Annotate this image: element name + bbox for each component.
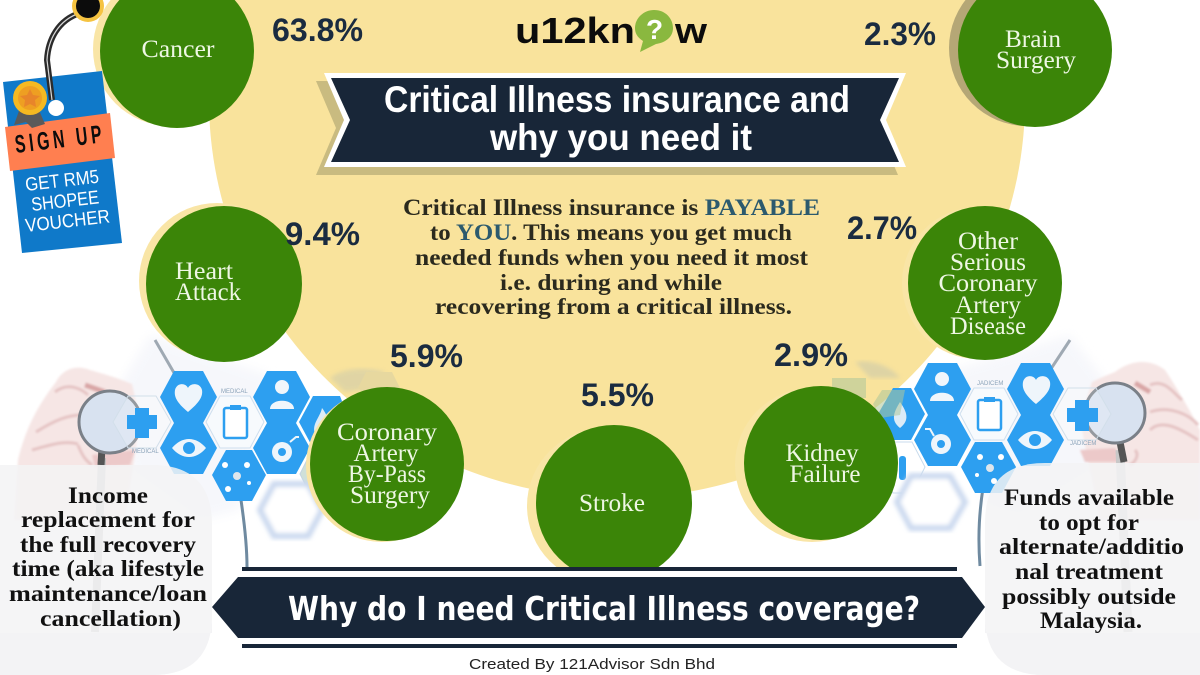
hex: clipboard: MEDICAL <box>221 389 248 395</box>
circle: Coronary Artery By-Pass Surgery: Coronary <box>337 419 438 446</box>
hand <box>14 368 140 520</box>
hex: blurred empty <box>897 476 965 528</box>
tag text: voucher: VOUCHER <box>24 206 111 237</box>
circle: Stroke: Stroke <box>579 490 645 517</box>
bottom banner <box>212 567 985 648</box>
circle: Other Serious Coronary Artery Disease: Coronary <box>938 270 1038 297</box>
panel: funds available <box>985 463 1200 675</box>
hex: clipboard: JADICEM <box>977 381 1003 387</box>
hex: clipboard <box>960 381 1018 440</box>
panel: funds available: possibly outside <box>1002 584 1176 610</box>
circle: Coronary Artery By-Pass Surgery: Surgery <box>350 482 431 509</box>
hex: person <box>914 363 971 415</box>
circle: Other Serious Coronary Artery Disease: Other <box>958 228 1019 255</box>
body text: to YOU. This means you get much <box>430 220 792 246</box>
tag text: sign up: SIGN UP <box>13 121 103 159</box>
body text: recovering from a critical illness. <box>435 294 792 320</box>
panel: income replacement: Income <box>68 483 148 509</box>
body text: i.e. during and while <box>500 270 722 296</box>
panel: income replacement <box>0 465 212 675</box>
hex: heart <box>160 371 217 423</box>
body text: Critical Illness insurance is PAYABLE <box>403 195 820 221</box>
hex: molecule <box>212 450 266 501</box>
panel: income replacement: the full recovery <box>20 532 196 558</box>
body text <box>403 195 820 320</box>
tag text: voucher: GET RM5 <box>24 167 100 196</box>
circle: Kidney Failure <box>735 386 898 542</box>
percent: 2.7%: 2.7% <box>847 210 917 246</box>
hex: clipboard <box>206 389 264 448</box>
percent: 5.9%: 5.9% <box>390 338 463 374</box>
hex: pale teal <box>300 448 350 500</box>
percent: 63.8%: 63.8% <box>272 12 363 48</box>
circle: Stroke <box>527 425 692 584</box>
hex: molecule <box>961 442 1016 493</box>
hex: cross <box>1053 388 1111 447</box>
faint hex over yellow <box>832 361 905 418</box>
lens <box>79 391 141 453</box>
circle: Other Serious Coronary Artery Disease: Disease <box>950 313 1026 340</box>
percent: 5.5%: 5.5% <box>581 377 654 413</box>
hand <box>1080 362 1200 520</box>
panel: funds available: nal treatment <box>1015 559 1163 585</box>
circle: Other Serious Coronary Artery Disease: Artery <box>955 292 1022 319</box>
circle: Brain Surgery: Surgery <box>996 47 1077 74</box>
panel: income replacement: maintenance/loan <box>9 581 207 607</box>
panel: funds available: Malaysia. <box>1040 608 1142 634</box>
panel: income replacement: cancellation) <box>40 606 181 632</box>
tag text: voucher: SHOPEE <box>30 187 100 216</box>
hex: flame <box>299 396 350 448</box>
panel: funds available: Funds available <box>1004 485 1174 511</box>
percent: 2.9%: 2.9% <box>774 337 848 373</box>
faint hex over yellow <box>330 369 400 395</box>
logo: u12know <box>515 10 708 52</box>
hex: cross <box>113 396 171 455</box>
percent: 2.3%: 2.3% <box>864 16 936 52</box>
hex: eye <box>1007 415 1064 466</box>
tag band <box>5 113 115 171</box>
body text: needed funds when you need it most <box>415 245 808 271</box>
hex: test tube <box>880 442 925 493</box>
circle: Coronary Artery By-Pass Surgery: By-Pass <box>348 461 426 488</box>
signup tag <box>3 0 122 253</box>
hex: wheelchair <box>253 423 310 474</box>
panel: income replacement: time (aka lifestyle <box>12 556 204 582</box>
hex: person <box>253 371 310 423</box>
circle: Kidney Failure: Kidney <box>786 440 859 467</box>
circle: Heart Attack: Heart <box>175 258 233 285</box>
circle: Heart Attack: Attack <box>175 279 241 306</box>
hex: eye <box>160 423 217 474</box>
logo: u12know: ? <box>646 14 663 45</box>
circle: Other Serious Coronary Artery Disease <box>902 206 1062 360</box>
peg <box>72 0 104 22</box>
hex: droplets <box>878 388 925 440</box>
hex: cross: JADICEM <box>1070 441 1096 447</box>
logo: u12know: w <box>674 10 708 51</box>
tag text: voucher <box>24 167 111 237</box>
panel: income replacement: replacement for <box>21 507 195 533</box>
yellow circle background <box>209 0 1025 498</box>
panel: funds available: alternate/additio <box>999 534 1184 560</box>
title text <box>384 79 850 158</box>
logo: u12know: u12kn <box>515 10 635 51</box>
circle: Cancer <box>93 0 254 128</box>
panel: funds available: to opt for <box>1039 510 1139 536</box>
tag hole <box>48 100 64 116</box>
photo: left hand with stethoscope and medical icons <box>14 335 400 632</box>
lens <box>1085 383 1145 443</box>
hex: blurred empty <box>260 484 322 536</box>
title text: why you need it <box>489 117 752 158</box>
hex: heart <box>1007 363 1064 415</box>
title banner <box>316 73 906 175</box>
circle: Kidney Failure: Failure <box>790 461 860 488</box>
circle: Brain Surgery <box>949 0 1112 127</box>
circle: Coronary Artery By-Pass Surgery <box>306 387 464 542</box>
string <box>47 13 80 100</box>
photo: right hand with stethoscope and medical icons <box>832 335 1200 632</box>
circle: Brain Surgery: Brain <box>1005 26 1061 53</box>
circle: Cancer: Cancer <box>142 36 215 63</box>
percent: 9.4%: 9.4% <box>285 216 360 252</box>
title text: Critical Illness insurance and <box>384 79 850 120</box>
circle: Other Serious Coronary Artery Disease: Serious <box>950 249 1026 276</box>
medal <box>13 81 47 128</box>
hex: wheelchair <box>914 415 971 466</box>
circle: Coronary Artery By-Pass Surgery: Artery <box>354 440 419 467</box>
footer credit: Created By 121Advisor Sdn Bhd <box>469 656 715 673</box>
hex: cross: MEDICAL <box>132 449 159 455</box>
bottom banner text: Why do I need Critical Illness coverage? <box>288 589 920 628</box>
circle: Heart Attack <box>139 203 302 362</box>
